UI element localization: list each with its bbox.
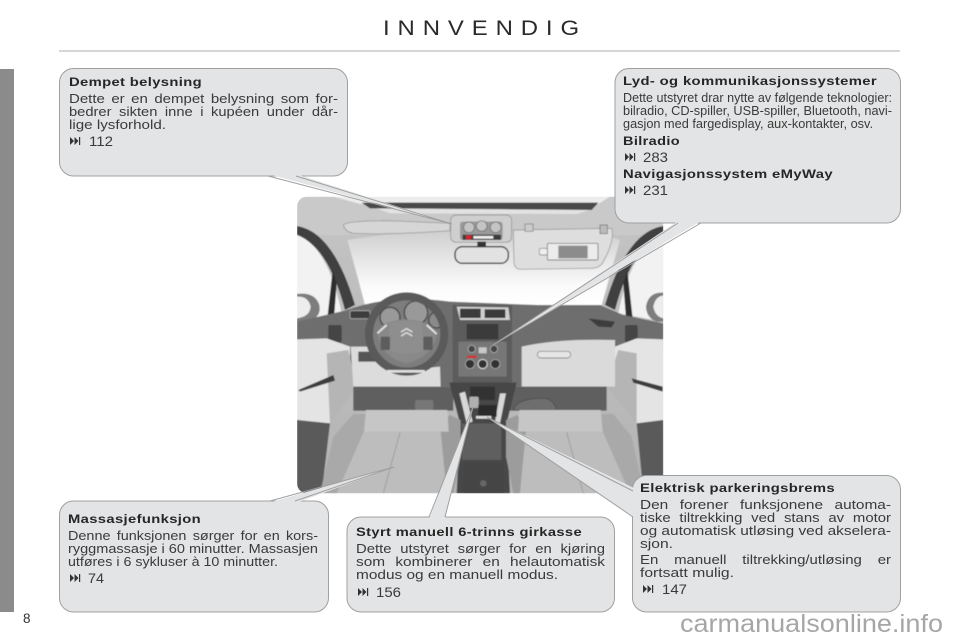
body text: og automatisk utløsing ved akselera- <box>640 523 891 538</box>
car interior illustration <box>297 197 663 493</box>
body text: som kombinerer en helautomatisk <box>356 554 606 569</box>
body text <box>640 497 892 580</box>
pointer to audio controls <box>493 221 701 345</box>
pointer to gear lever <box>429 407 473 519</box>
body text: gasjon med fargedisplay, aux-kontakter, osv. <box>623 116 873 131</box>
body text: tiske tiltrekking ved stans av motor <box>640 510 892 525</box>
body text: Dette utstyret drar nytte av følgende teknologier: <box>623 90 892 105</box>
page reference 283: 283 <box>643 150 668 165</box>
panel: Massasjefunksjon <box>60 467 394 612</box>
centre stack <box>453 305 512 383</box>
headliner and sunroof <box>335 196 610 214</box>
left sun visor <box>343 221 450 234</box>
panel: Lyd- og kommunikasjonssystemer <box>493 68 900 345</box>
body text: ryggmassasje i 60 minutter. Massasjen <box>68 541 318 556</box>
body text: En manuell tiltrekking/utløsing er <box>640 552 892 567</box>
body text: modus og en manuell modus. <box>356 567 558 582</box>
knee panel <box>351 347 441 387</box>
body text: bedrer sikten inne i kupéen under dår- <box>69 104 338 119</box>
page reference 156: 156 <box>376 585 401 600</box>
watermark: carmanualsonline.info <box>680 610 943 638</box>
left seat <box>320 410 461 493</box>
body text: Denne funksjonen sørger for en kors- <box>68 528 318 543</box>
heading: Massasjefunksjon <box>68 512 201 526</box>
pointer to parking brake <box>487 417 636 519</box>
page reference 283 <box>625 150 668 165</box>
page number: 8 <box>23 611 31 626</box>
page reference 156 <box>358 585 401 600</box>
pointer to overhead lighting <box>268 174 452 224</box>
body text: Den forener funksjonene automa- <box>640 497 891 512</box>
glove box <box>522 318 615 387</box>
subheading Bilradio: Bilradio <box>623 134 680 148</box>
steering wheel <box>369 296 445 373</box>
centre console and gear lever <box>449 383 518 493</box>
body text: bilradio, CD-spiller, USB-spiller, Bluetooth, navi- <box>623 103 892 118</box>
subheading Navigasjonssystem eMyWay: Navigasjonssystem eMyWay <box>623 167 833 181</box>
body text <box>356 541 606 582</box>
body text: Dette er en dempet belysning som for- <box>69 91 338 106</box>
sidebar tab <box>0 69 14 612</box>
page reference 231: 231 <box>643 183 668 198</box>
right seat <box>506 410 644 493</box>
page reference 231 <box>625 183 668 198</box>
page reference 112: 112 <box>89 134 113 149</box>
page reference 147: 147 <box>662 582 687 597</box>
left pillar and side window <box>297 226 355 322</box>
page reference 147 <box>643 582 687 597</box>
heading: Lyd- og kommunikasjonssystemer <box>623 74 877 88</box>
page reference 112 <box>70 134 113 149</box>
page reference 74 <box>70 571 105 586</box>
page reference 74: 74 <box>88 571 105 586</box>
rear view mirror <box>455 242 508 263</box>
pointer to seat <box>268 467 394 503</box>
left door panel <box>297 325 357 493</box>
heading: Elektrisk parkeringsbrems <box>640 481 835 495</box>
floor footwell <box>353 387 453 411</box>
body text <box>69 91 338 132</box>
overhead console with dim lighting <box>451 215 512 242</box>
title: INNVENDIG <box>383 16 579 40</box>
right door panel <box>614 324 664 476</box>
right pillar and side window <box>605 226 663 322</box>
right sun visor with mirror <box>513 224 612 269</box>
heading: Styrt manuell 6-trinns girkasse <box>356 525 582 539</box>
body text <box>623 90 892 131</box>
dashboard <box>297 299 663 387</box>
windshield <box>347 231 620 305</box>
body text: sjon. <box>640 536 673 551</box>
title rule <box>59 50 900 52</box>
body text: utføres i 6 sykluser à 10 minutter. <box>68 554 278 569</box>
panel: Styrt manuell 6-trinns girkasse <box>347 407 614 612</box>
body text: Dette utstyret sørger for en kjøring <box>356 541 605 556</box>
body text: lige lysforhold. <box>69 117 166 132</box>
body text: fortsatt mulig. <box>640 565 734 580</box>
panel: Elektrisk parkeringsbrems <box>487 417 900 612</box>
heading: Dempet belysning <box>69 75 202 89</box>
body text <box>68 528 318 569</box>
panel: Dempet belysning <box>60 68 452 224</box>
